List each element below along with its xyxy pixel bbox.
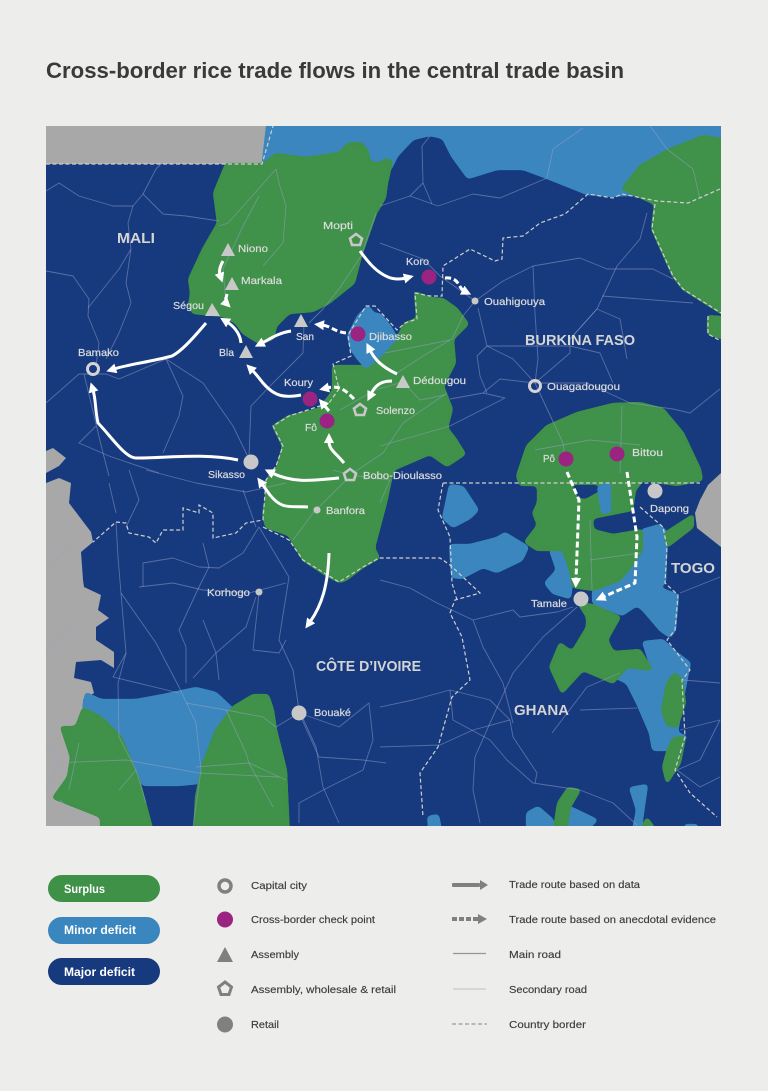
legend: line types: Main road <box>509 949 561 961</box>
map symbols <box>88 234 662 720</box>
city labels: Dapong <box>650 503 689 515</box>
country labels: BURKINA FASO <box>525 332 635 349</box>
map panel <box>46 118 732 836</box>
grey neighbouring countries <box>46 126 721 827</box>
city labels: Banfora <box>326 505 365 517</box>
retail points <box>244 298 662 720</box>
country labels <box>117 230 715 719</box>
legend: line types <box>452 879 716 1031</box>
city labels: Bla <box>219 347 234 359</box>
legend: area categories <box>48 875 160 985</box>
surplus areas <box>53 136 732 836</box>
city labels: Fô <box>305 422 317 434</box>
legend: area categories: Surplus <box>64 884 105 896</box>
city labels: Sikasso <box>208 469 245 481</box>
city labels: Tamale <box>531 598 567 610</box>
legend: map symbols: Cross-border check point <box>251 914 375 926</box>
city labels: Bamako <box>78 347 119 359</box>
city labels: Dédougou <box>413 375 466 387</box>
city labels: Koury <box>284 377 314 389</box>
city labels: Koro <box>406 256 429 268</box>
legend: map symbols: Retail <box>251 1019 279 1031</box>
city labels: Pô <box>543 453 555 465</box>
city labels: Ségou <box>173 300 204 312</box>
legend: line types: Trade route based on data <box>509 879 640 891</box>
city labels: Djibasso <box>369 331 412 343</box>
legend: line types: Country border <box>509 1019 587 1031</box>
city labels: Ouahigouya <box>484 296 545 308</box>
city labels: Niono <box>238 243 268 255</box>
legend: area categories: Major deficit <box>64 967 135 979</box>
country labels: MALI <box>117 230 155 247</box>
country labels: TOGO <box>671 560 715 577</box>
legend: area categories: Minor deficit <box>64 925 136 937</box>
city labels <box>78 220 689 719</box>
city labels: Bouaké <box>314 707 351 719</box>
country labels: GHANA <box>514 702 569 719</box>
city labels: Bobo-Dioulasso <box>363 470 442 482</box>
city labels: Solenzo <box>376 405 415 417</box>
city labels: Bittou <box>632 447 663 459</box>
legend: map symbols: Capital city <box>251 880 308 892</box>
legend: line types: Secondary road <box>509 984 587 996</box>
city labels: Mopti <box>323 220 353 232</box>
legend: map symbols: Assembly <box>251 949 300 961</box>
legend: map symbols <box>217 880 396 1032</box>
country borders <box>46 126 721 817</box>
capital cities <box>88 364 540 392</box>
cross-border check points <box>302 270 624 466</box>
minor deficit areas <box>83 118 732 836</box>
city labels: Ouagadougou <box>547 381 620 393</box>
legend: map symbols: Assembly, wholesale & retail <box>251 984 396 996</box>
city labels: Markala <box>241 275 282 287</box>
city labels: San <box>296 331 314 343</box>
trade routes <box>93 251 637 622</box>
city labels: Korhogo <box>207 587 250 599</box>
assembly triangles <box>205 243 410 388</box>
assembly, wholesale and retail pentagons <box>344 234 366 480</box>
country labels: CÔTE D’IVOIRE <box>316 657 421 675</box>
road network <box>46 126 720 827</box>
title: Cross-border rice trade flows in the central trade basin <box>46 58 624 83</box>
legend: line types: Trade route based on anecdotal evidence <box>509 914 716 926</box>
